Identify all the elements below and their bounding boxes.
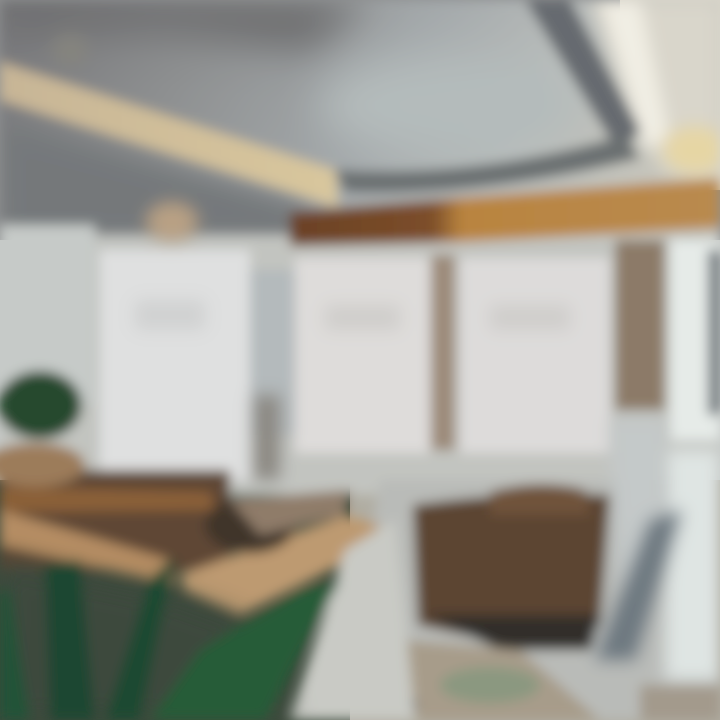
plant (0, 371, 82, 439)
bright upper right wall (590, 0, 720, 190)
foliage foreground (0, 555, 340, 720)
ceiling shadow under beam (0, 120, 340, 245)
diagonal ceiling rib (525, 0, 640, 155)
left poster smudge (135, 300, 205, 330)
left window (0, 225, 95, 405)
light lower right (665, 450, 720, 680)
diagonal light beam (0, 62, 338, 207)
table and wood furniture (0, 443, 380, 615)
wood beam (290, 178, 720, 246)
floor and lower background (340, 480, 720, 720)
small lamp (146, 202, 198, 242)
panel: right white poster (460, 258, 610, 453)
white wall base (290, 520, 415, 720)
lower wall background (0, 235, 720, 495)
rug and floor bottom (400, 640, 600, 720)
panel: centre white poster (295, 258, 430, 453)
strip between posters (250, 270, 295, 435)
column: right (615, 240, 665, 410)
sofa (413, 484, 610, 650)
chair back light (610, 420, 665, 600)
curved ceiling rib (335, 135, 640, 193)
bright light streak (600, 0, 670, 150)
window frame (708, 250, 720, 415)
ceiling (0, 0, 720, 250)
panel: left white poster (100, 250, 250, 480)
vase (254, 395, 280, 480)
column: centre (431, 255, 455, 450)
right window (670, 240, 720, 440)
right poster smudge (490, 305, 570, 330)
centre poster smudge (325, 305, 400, 330)
grey chair right (595, 510, 682, 660)
warm glow (663, 126, 720, 174)
